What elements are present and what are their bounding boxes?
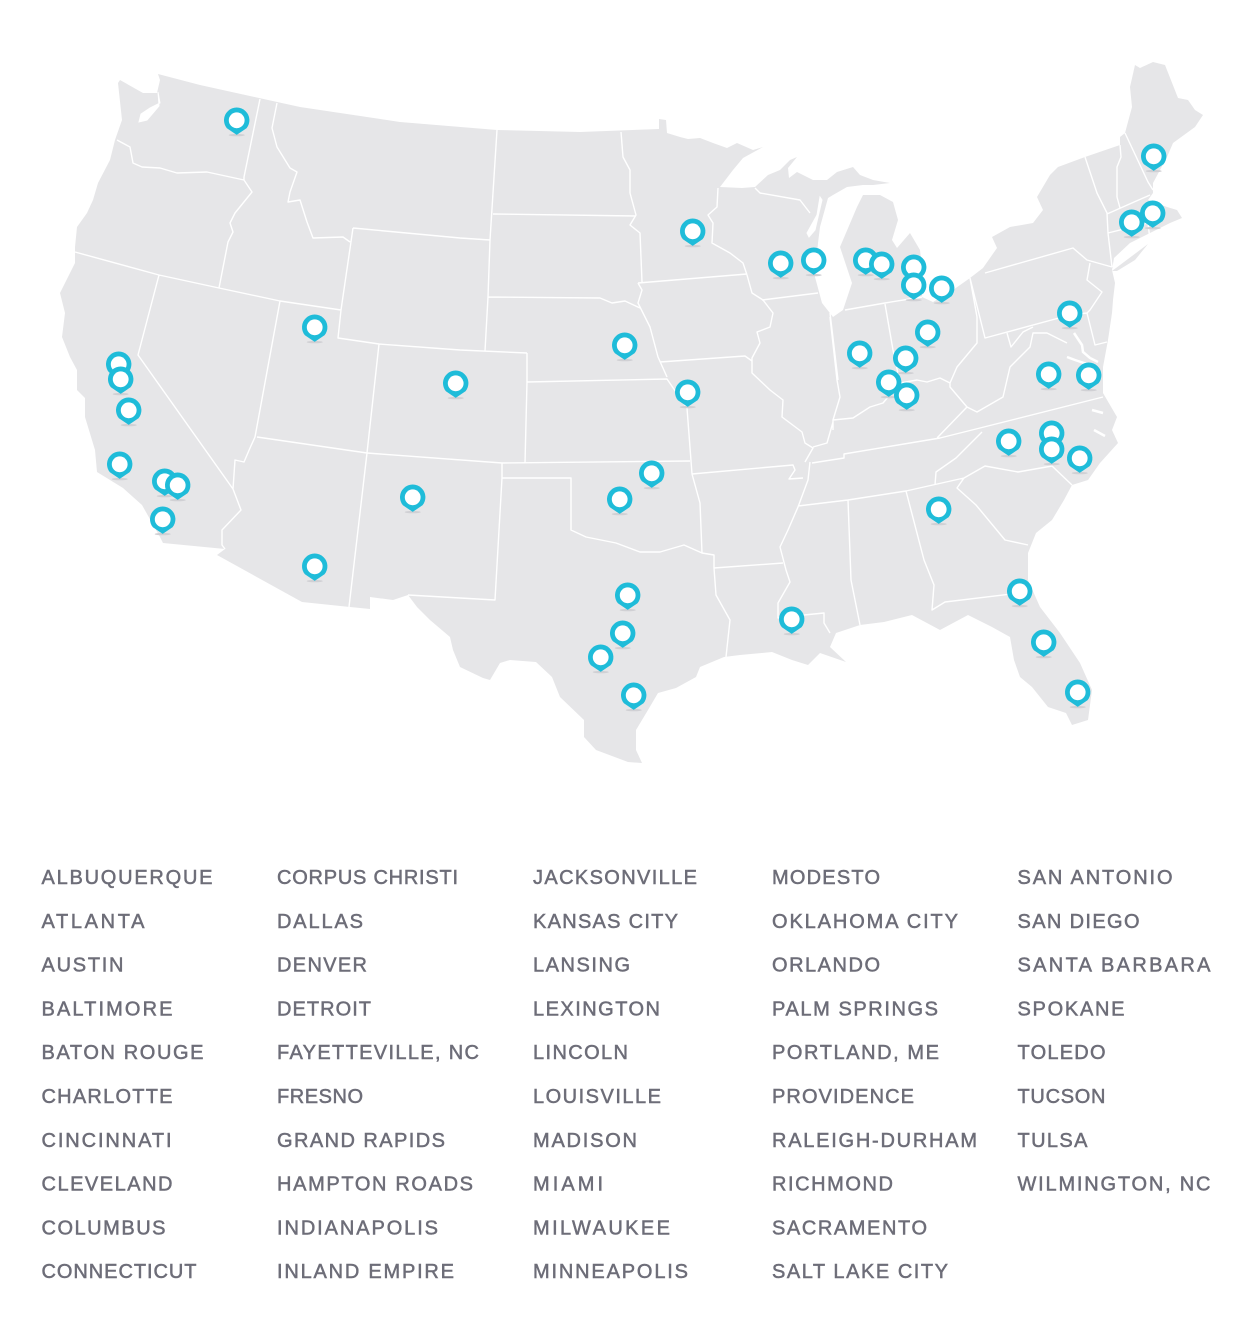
city list column 5: WILMINGTON, NC (1018, 1174, 1210, 1196)
state borders (75, 99, 1153, 657)
pin: Indianapolis (847, 341, 872, 369)
pin: Fresno (116, 398, 141, 426)
pin: Modesto (108, 367, 133, 395)
city list column 1: CONNECTICUT (42, 1261, 196, 1283)
pin: Tulsa (639, 461, 664, 489)
pin: Miami (1065, 680, 1090, 708)
pin: Richmond (1036, 362, 1061, 390)
city list column 2: DETROIT (277, 998, 371, 1020)
pin: Louisville (876, 370, 901, 398)
city list column 2: HAMPTON ROADS (277, 1174, 473, 1196)
pin: Spokane (224, 108, 249, 136)
pin: Inland Empire (152, 469, 177, 497)
city list column 1: BALTIMORE (42, 998, 172, 1020)
pin: Fayetteville, NC (1039, 437, 1064, 465)
city list column 1: CHARLOTTE (42, 1086, 172, 1108)
city list column 2: DENVER (277, 955, 367, 977)
city list column 4: RICHMOND (772, 1174, 893, 1196)
pin: Hampton Roads (1076, 363, 1101, 391)
pin: Charlotte (996, 429, 1021, 457)
pin: Austin (610, 621, 635, 649)
city list column 5: TUCSON (1018, 1086, 1106, 1108)
city list column 4: SALT LAKE CITY (772, 1261, 948, 1283)
pin: Baton Rouge (779, 607, 804, 635)
pin: Tucson (302, 554, 327, 582)
pin: Cincinnati (893, 346, 918, 374)
city list column 1: ALBUQUERQUE (42, 867, 212, 889)
pin: Lincoln (612, 333, 637, 361)
pin: Milwaukee (801, 248, 826, 276)
city list column 2: DALLAS (277, 911, 363, 933)
pin: Baltimore (1057, 301, 1082, 329)
city list column 3 (533, 867, 697, 1283)
city list column 5: SAN DIEGO (1018, 911, 1140, 933)
pin: Grand Rapids (853, 248, 878, 276)
city list column 4: SACRAMENTO (772, 1217, 927, 1239)
pin: San Antonio (588, 645, 613, 673)
city list column 5: SPOKANE (1018, 998, 1124, 1020)
pin: Portland, ME (1141, 144, 1166, 172)
city list column 4: ORLANDO (772, 955, 880, 977)
pin: Jacksonville (1007, 579, 1032, 607)
pin: Orlando (1031, 630, 1056, 658)
city list column 2: FAYETTEVILLE, NC (277, 1042, 479, 1064)
city list column 3: JACKSONVILLE (533, 867, 697, 889)
pin: Palm Springs (165, 473, 190, 501)
pin: Albuquerque (400, 485, 425, 513)
city list column 2: GRAND RAPIDS (277, 1130, 445, 1152)
pin: Wilmington, NC (1067, 446, 1092, 474)
city list column 1: CINCINNATI (42, 1130, 172, 1152)
city list column 3: KANSAS CITY (533, 911, 678, 933)
city list column 4: RALEIGH-DURHAM (772, 1130, 977, 1152)
pin: Kansas City (675, 380, 700, 408)
pin: Corpus Christi (621, 683, 646, 711)
land mass of the contiguous states (60, 62, 1203, 763)
pin: Oklahoma City (607, 487, 632, 515)
city list column 3: MADISON (533, 1130, 637, 1152)
city list column 3: LOUISVILLE (533, 1086, 661, 1108)
pin: Columbus (915, 320, 940, 348)
pin: Detroit (901, 273, 926, 301)
inland water: Puget Sound, Green Bay, Chesapeake and sounds (139, 92, 1105, 436)
city list column 2: INLAND EMPIRE (277, 1261, 454, 1283)
pin: Raleigh-Durham (1039, 421, 1064, 449)
city list column 3: LINCOLN (533, 1042, 628, 1064)
city list column 1: ATLANTA (42, 911, 145, 933)
pin: Lexington (894, 383, 919, 411)
city list column 3: LEXINGTON (533, 998, 660, 1020)
city list column 1: BATON ROUGE (42, 1042, 204, 1064)
city list column 2: INDIANAPOLIS (277, 1217, 438, 1239)
location pins (106, 108, 1166, 711)
city list column 2 (277, 867, 479, 1283)
city list column 1: AUSTIN (42, 955, 124, 977)
pin: Atlanta (926, 497, 951, 525)
pin: Toledo / Cleveland (929, 276, 954, 304)
city list column 3: MINNEAPOLIS (533, 1261, 688, 1283)
city list column 5: TULSA (1018, 1130, 1088, 1152)
pin: Santa Barbara (107, 452, 132, 480)
city list column 1 (42, 867, 212, 1283)
pin: Madison (768, 251, 793, 279)
city list column 1: COLUMBUS (42, 1217, 166, 1239)
pin: Lansing (869, 252, 894, 280)
city list column 2: CORPUS CHRISTI (277, 867, 458, 889)
city list column 5 (1018, 867, 1211, 1196)
pin: Minneapolis (680, 219, 705, 247)
pin: Michigan east (901, 255, 926, 283)
pin: Connecticut (1119, 210, 1144, 238)
pin: Providence (1140, 201, 1165, 229)
city list column 4: PROVIDENCE (772, 1086, 914, 1108)
pin: San Diego (150, 507, 175, 535)
city list column 3: MIAMI (533, 1174, 603, 1196)
city list column 5: SANTA BARBARA (1018, 955, 1211, 977)
city list column 4: PALM SPRINGS (772, 998, 938, 1020)
city list column 4: PORTLAND, ME (772, 1042, 939, 1064)
pin: Sacramento (106, 352, 131, 380)
city list column 2: FRESNO (277, 1086, 363, 1108)
city list column 1: CLEVELAND (42, 1174, 172, 1196)
city list column 3: LANSING (533, 955, 630, 977)
city list column 5: TOLEDO (1018, 1042, 1106, 1064)
pin: Salt Lake City (302, 315, 327, 343)
pin: Dallas (615, 583, 640, 611)
pin: Denver (443, 371, 468, 399)
city list column 4: OKLAHOMA CITY (772, 911, 958, 933)
city list column 4: MODESTO (772, 867, 880, 889)
city list column 5: SAN ANTONIO (1018, 867, 1172, 889)
city list column 3: MILWAUKEE (533, 1217, 670, 1239)
city list column 4 (772, 867, 977, 1283)
